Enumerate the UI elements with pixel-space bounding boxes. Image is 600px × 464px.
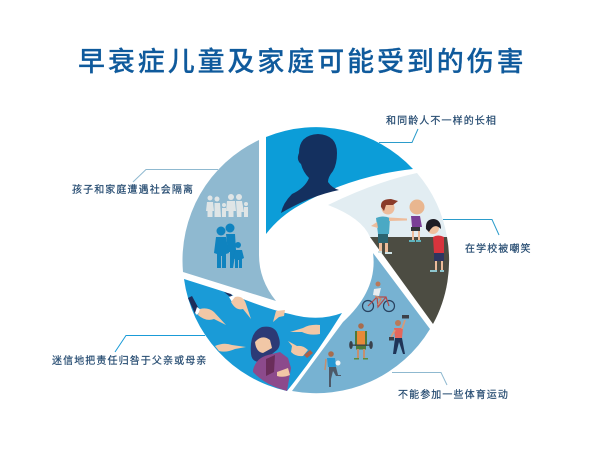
icon: child silhouette <box>281 134 339 213</box>
icon: worried woman <box>251 327 291 391</box>
icon: football player <box>325 351 341 387</box>
leader line: isolation <box>133 170 218 182</box>
panel: social isolation <box>182 140 276 301</box>
panel: different appearance <box>266 127 413 234</box>
panel: unable to play sports <box>292 253 430 393</box>
panel: blaming parents <box>184 279 342 391</box>
label: blaming: 迷信地把责任归咎于父亲或母亲 <box>52 354 207 367</box>
leader line: blaming <box>115 336 205 352</box>
icon: boy pointing <box>371 199 407 254</box>
leader line: appearance <box>379 129 418 142</box>
icon: bald child <box>409 200 424 242</box>
icon: girl laughing <box>426 219 444 272</box>
panel: mocked at school <box>328 173 449 324</box>
icon: pointing hands <box>188 292 320 358</box>
label: school: 在学校被嘲笑 <box>465 242 532 255</box>
title: 早衰症儿童及家庭可能受到的伤害 <box>78 47 526 77</box>
icon: grey family <box>206 194 248 217</box>
icon: weightlifter <box>349 323 373 360</box>
label: isolation: 孩子和家庭遭遇社会隔离 <box>72 183 194 196</box>
icon: blue family <box>214 224 244 268</box>
icon: cyclist <box>362 282 394 312</box>
label: sports: 不能参加一些体育运动 <box>398 388 509 401</box>
icon: man with dumbbell <box>389 315 409 354</box>
leader line: sports <box>392 372 447 385</box>
leader line: school <box>443 220 499 235</box>
label: appearance: 和同龄人不一样的长相 <box>386 114 497 127</box>
